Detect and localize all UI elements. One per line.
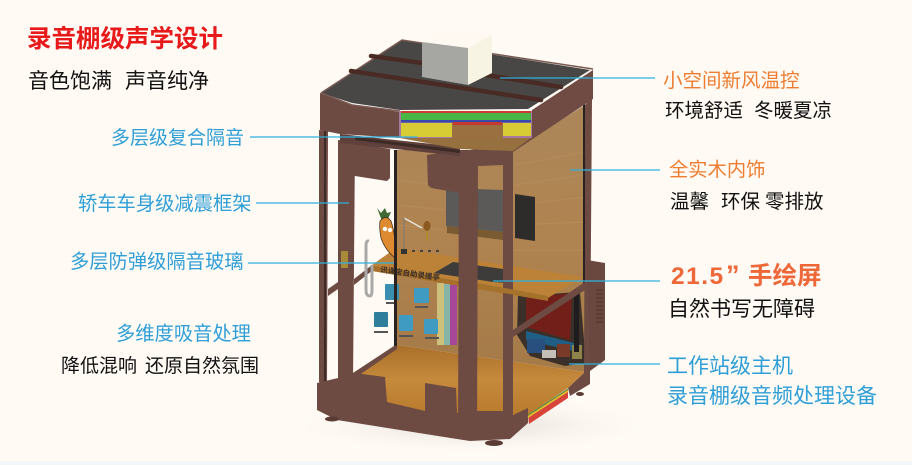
subtitle: 音色饱满 xyxy=(28,70,112,93)
upper door panels xyxy=(338,134,460,193)
subtitle: 声音纯净 xyxy=(125,70,209,93)
label: drawing screen: 手绘屏 xyxy=(748,262,822,290)
label: multi-layer insulation: 多层级复合隔音 xyxy=(111,127,244,149)
desk shelf xyxy=(372,248,583,301)
text: ventilation detail: 环境舒适 xyxy=(665,100,743,122)
floor acoustic layers xyxy=(528,389,568,424)
promotional caption on glass: 讯课宝自助录播亭 xyxy=(380,264,441,282)
label: glass: 多层防弹级隔音玻璃 xyxy=(70,251,244,273)
text: wood detail: 环保 xyxy=(721,191,760,213)
text: absorption detail: 还原自然氛围 xyxy=(145,355,259,377)
roof right fascia xyxy=(470,70,593,152)
hanging mic figure xyxy=(401,218,439,254)
label: wood interior: 全实木内饰 xyxy=(669,159,765,181)
label: ventilation: 小空间新风温控 xyxy=(663,70,800,92)
recording booth illustration xyxy=(317,30,605,446)
door handle xyxy=(366,241,372,296)
wood floor xyxy=(353,345,585,415)
label: drawing screen: 21.5 xyxy=(671,263,725,290)
acoustic layer cross-section xyxy=(399,111,532,138)
booth feet xyxy=(325,392,584,446)
roof soffit xyxy=(400,137,532,151)
side cabinet xyxy=(587,260,605,371)
label: sound absorption: 多维度吸音处理 xyxy=(116,323,251,345)
text: absorption detail: 降低混响 xyxy=(61,355,137,377)
text: wood detail: 零排放 xyxy=(765,191,824,213)
roof top xyxy=(321,40,590,110)
wall posters xyxy=(437,283,457,345)
booth back wall xyxy=(397,105,585,372)
text: ventilation detail: 冬暖夏凉 xyxy=(754,100,832,122)
glass icons xyxy=(374,284,439,339)
roof left fascia xyxy=(320,93,400,138)
text: workstation detail: 录音棚级音频处理设备 xyxy=(667,385,877,408)
workstation equipment xyxy=(517,292,586,366)
wall screen xyxy=(446,188,535,241)
frame posts xyxy=(319,98,592,440)
leader lines xyxy=(248,78,660,364)
roof rails xyxy=(351,56,561,100)
booth base xyxy=(317,370,590,441)
ventilation box xyxy=(422,30,492,85)
carrot mascot xyxy=(377,208,395,258)
label: frame: 轿车车身级减震框架 xyxy=(78,193,252,215)
drawing tablet xyxy=(434,262,510,283)
door hinge plate xyxy=(341,251,348,268)
text: wood detail: 温馨 xyxy=(670,191,709,213)
title: 录音棚级声学设计 xyxy=(27,25,223,53)
text: screen detail: 自然书写无障碍 xyxy=(668,298,815,321)
label: drawing screen: ” xyxy=(726,260,740,290)
label: workstation: 工作站级主机 xyxy=(667,355,793,378)
wall grain xyxy=(398,152,585,250)
